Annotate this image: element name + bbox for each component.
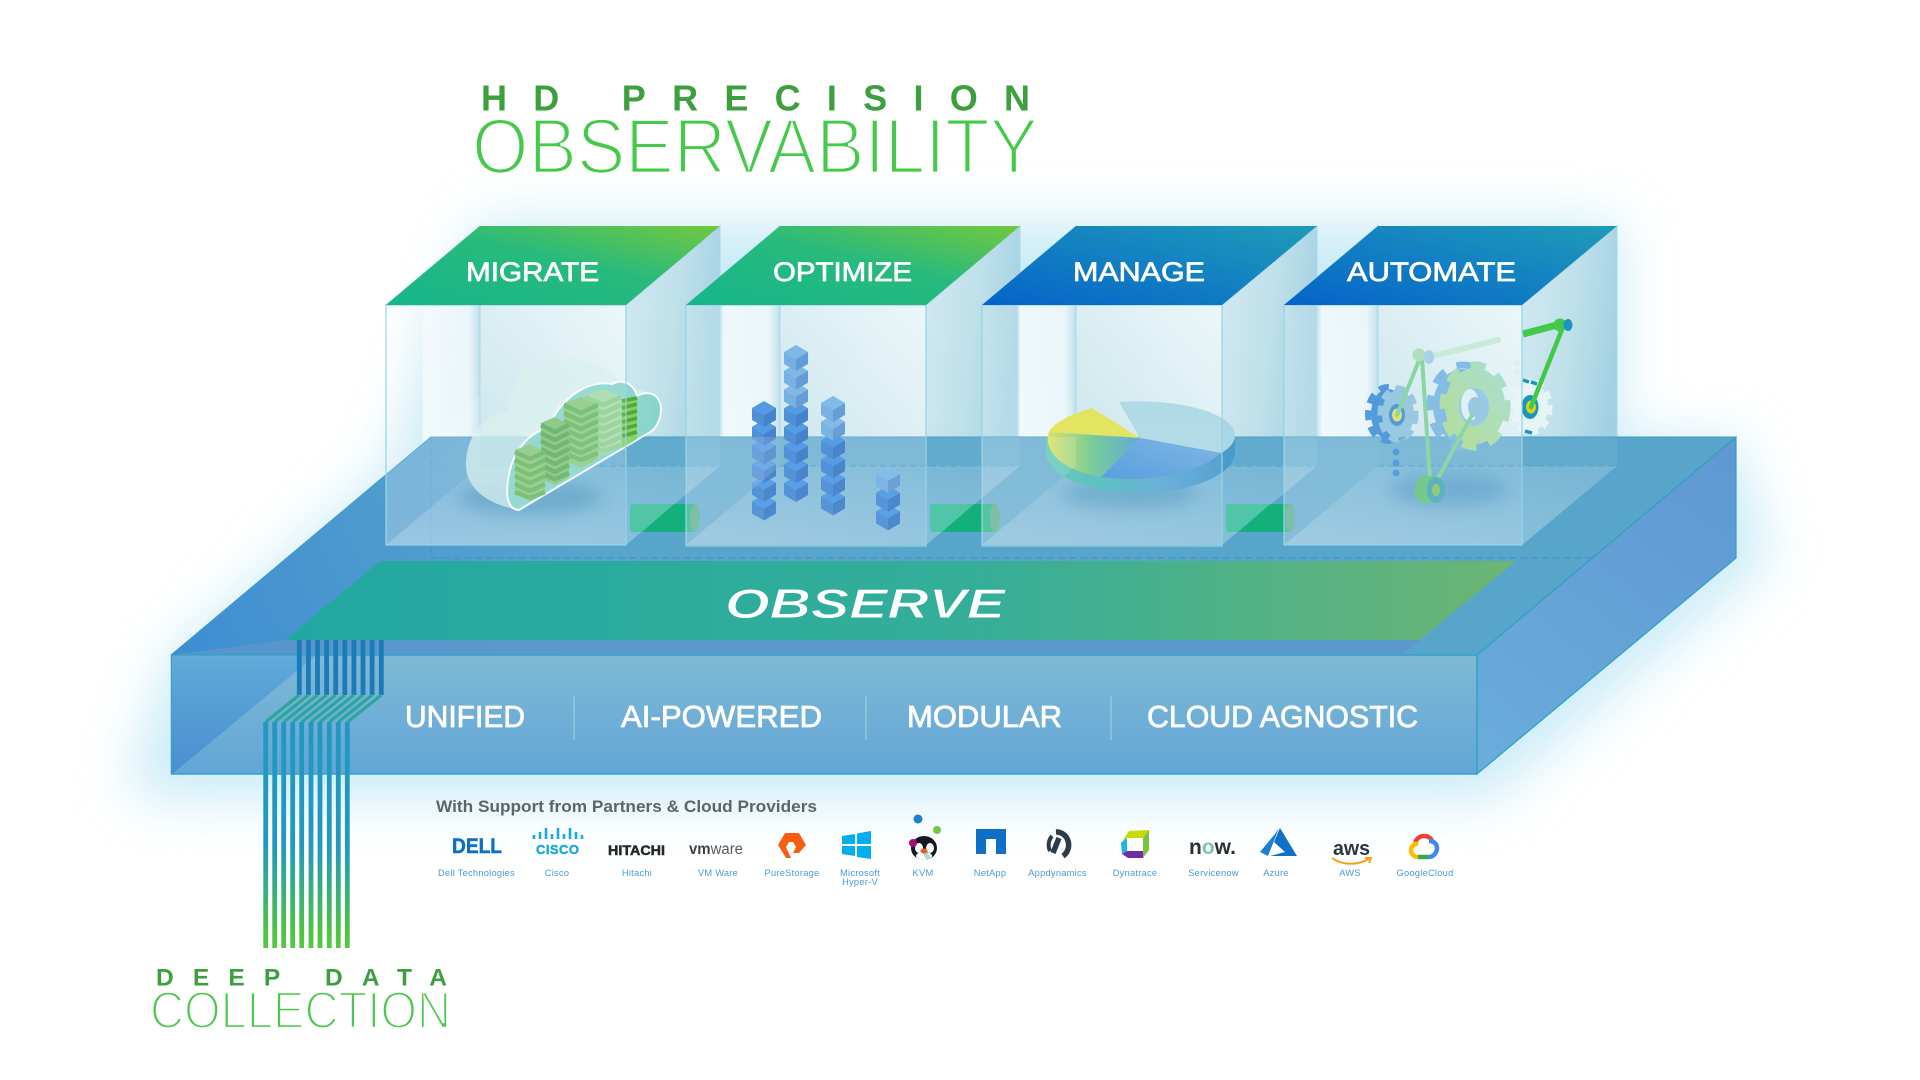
logo: purestorage: PureStorage	[765, 868, 819, 878]
column 3	[821, 396, 845, 516]
text: cloud agnostic: CLOUD AGNOSTIC	[1147, 699, 1418, 734]
panel: automate header	[1284, 226, 1617, 305]
column 4	[876, 467, 900, 530]
logo: google cloud: GoogleCloud	[1396, 868, 1454, 878]
logo: kvm	[909, 814, 941, 878]
text: modular: MODULAR	[907, 699, 1062, 734]
panel: observe band	[285, 561, 1516, 640]
heading: automate: AUTOMATE	[1347, 257, 1516, 287]
panel: manage header	[982, 226, 1317, 305]
chart: blue cube columns	[752, 345, 900, 530]
logo: vmware	[689, 841, 743, 878]
logo: cisco: CISCO	[536, 842, 579, 857]
server stacks	[515, 389, 637, 498]
title: observability: OBSERVABILITY	[472, 102, 1038, 190]
large gear	[1430, 365, 1507, 447]
icon: gears and linkage	[1368, 318, 1572, 507]
pale gear	[1512, 360, 1550, 433]
logo: purestorage	[765, 833, 819, 878]
background glow	[125, 222, 1770, 800]
joints	[1412, 318, 1572, 503]
logo: dell: DELL	[452, 835, 502, 858]
logo: cisco: Cisco	[545, 868, 569, 878]
logo: servicenow	[1188, 836, 1239, 878]
text: unified: UNIFIED	[405, 699, 525, 734]
heading: optimize: OPTIMIZE	[773, 257, 912, 287]
column 1	[752, 401, 776, 520]
logo: microsoft hyper-v: Microsoft	[840, 868, 880, 878]
logo: servicenow: Servicenow	[1188, 868, 1239, 878]
heading: observe: OBSERVE	[725, 580, 1008, 627]
logo: cisco	[534, 828, 582, 878]
logo: aws: AWS	[1339, 868, 1361, 878]
text: AI-powered: AI-POWERED	[621, 699, 822, 734]
linkage rods	[1397, 325, 1563, 480]
icon: connector cylinder 2	[930, 504, 1000, 532]
heading: partners and cloud providers: With Support from Partners & Cloud Providers	[436, 798, 817, 816]
small gear	[1368, 387, 1416, 441]
logo: microsoft hyper-v	[840, 831, 880, 887]
logo: aws	[1332, 838, 1371, 878]
panel: optimize header	[686, 226, 1020, 305]
logo: netapp	[974, 829, 1006, 878]
logo: vmware: vmware	[689, 841, 743, 858]
data lines	[266, 640, 381, 948]
logo: azure: Azure	[1263, 868, 1289, 878]
panel: box floors	[386, 437, 1617, 545]
logo: appdynamics: Appdynamics	[1028, 868, 1087, 878]
panel: front glass of boxes	[386, 305, 1617, 546]
panel: migrate header	[386, 226, 720, 305]
logo: aws: aws	[1333, 838, 1370, 860]
title: deep data: DEEP DATA	[156, 964, 447, 992]
logo: servicenow: now.	[1189, 836, 1236, 859]
chart: pie	[1046, 401, 1235, 509]
logo: dynatrace	[1113, 830, 1157, 878]
logo: hitachi	[608, 843, 665, 878]
heading: migrate: MIGRATE	[466, 257, 599, 287]
logo: google cloud	[1396, 836, 1454, 878]
logo: kvm: KVM	[913, 868, 933, 878]
title: HD precision: HD PRECISION	[481, 78, 1030, 118]
logo: dell	[438, 835, 515, 878]
logo: netapp: NetApp	[974, 868, 1006, 878]
column 2	[784, 345, 808, 502]
logo: hitachi: HITACHI	[608, 843, 665, 858]
icon: connector cylinder 1	[630, 504, 700, 532]
title: collection: COLLECTION	[150, 982, 451, 1040]
logo: dynatrace: Dynatrace	[1113, 868, 1157, 878]
heading: manage: MANAGE	[1073, 257, 1205, 287]
logo: microsoft hyper-v: Hyper-V	[842, 877, 878, 887]
logo: hitachi: Hitachi	[622, 868, 652, 878]
panel: platform front face	[172, 655, 1477, 774]
logo: azure	[1260, 828, 1297, 878]
panel: platform right face	[1477, 437, 1736, 774]
dots	[1392, 448, 1400, 476]
panel: platform top surface	[171, 437, 1736, 655]
logo: vmware: VM Ware	[698, 868, 738, 878]
logo: appdynamics	[1028, 832, 1087, 878]
panel: box back walls	[386, 226, 1617, 545]
icon: cloud with servers	[458, 358, 661, 515]
logo: dell: Dell Technologies	[438, 868, 515, 878]
icon: connector cylinder 3	[1226, 504, 1295, 532]
